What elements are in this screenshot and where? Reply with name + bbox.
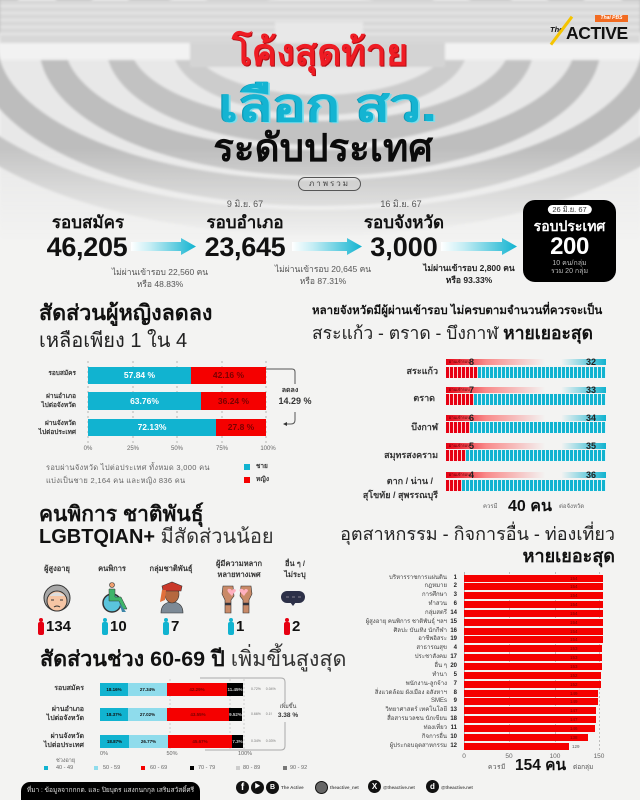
row: district xyxy=(40,392,266,410)
note: should be 40 per province xyxy=(483,498,584,515)
note: province to national totals xyxy=(46,462,210,484)
row: district: ผ่านอำเภอ xyxy=(52,706,84,713)
chart: occupation groups: 129 xyxy=(572,744,580,749)
chart: occupation groups: 9 xyxy=(454,698,457,704)
arrow 3 xyxy=(441,238,517,255)
row: district xyxy=(40,708,270,721)
province row: Sa Kaeo: สระแก้ว xyxy=(407,366,438,376)
note: should be 40 per province: 40 คน xyxy=(508,498,552,515)
chart: occupation groups: 17 xyxy=(450,654,457,660)
chart: occupation groups: กฎหมาย xyxy=(425,583,447,589)
title: โค้งสุดท้าย xyxy=(232,32,408,73)
icon: X: X xyxy=(372,782,377,791)
icon: elderly face xyxy=(44,584,70,612)
chart: occupation groups: 152 xyxy=(570,682,578,687)
row: province: 72.13% xyxy=(138,422,166,432)
group: gender diversity xyxy=(216,559,262,635)
heading: occupations missing xyxy=(330,522,616,568)
legend: gender: หญิง xyxy=(256,476,269,483)
row: province: ไปต่อประเทศ xyxy=(44,742,84,749)
icon: youtube: ▶ xyxy=(254,784,260,790)
bracket: decrease 14.29%: ลดลง xyxy=(282,387,298,394)
logo: The Active: The xyxy=(550,25,563,34)
step: national black card xyxy=(523,200,616,282)
province row: Samut Songkhram xyxy=(384,441,606,461)
row: province: 27.8 % xyxy=(228,422,254,432)
chart: occupation groups: พนักงาน-ลูกจ้าง xyxy=(406,681,447,687)
arrow 2 xyxy=(292,238,362,255)
legend: age groups xyxy=(44,758,314,774)
province row: Trat: ผ่านเข้ารอบ xyxy=(449,387,470,392)
axis labels: 0 xyxy=(462,753,466,760)
chart: occupation groups: ผู้ประกอบอุตสาหกรรม xyxy=(390,743,447,749)
note: should be 154 per group: ควรมี xyxy=(488,764,506,771)
group: other / unspecified: ไม่ระบุ xyxy=(284,570,306,579)
province row: Samut Songkhram: ผ่านเข้ารอบ xyxy=(449,443,470,448)
step: district: 23,645 xyxy=(205,232,285,262)
chart: occupation groups: 154 xyxy=(570,629,578,634)
heading: disabled, ethnic, LGBTQIAN+: LGBTQIAN+ มีสัดส่วนน้อย xyxy=(39,526,274,548)
note: should be 40 per province: ควรมี xyxy=(483,504,498,510)
bracket: decrease 14.29%: 14.29 % xyxy=(278,396,312,406)
row: district: ไปต่อจังหวัด xyxy=(47,715,84,722)
chart: occupation groups: สื่อสารมวลชน นักเขียน xyxy=(387,716,447,722)
province row: Sa Kaeo: ผ่านเข้ารอบ xyxy=(449,359,470,364)
note: province to national totals: รอบผ่านจังหวัด ไปต่อประเทศ ทั้งหมด 3,000 คน xyxy=(46,463,210,472)
row: province: 0.34% 0.03% xyxy=(251,739,276,743)
row: district: 0.66% 0.1% xyxy=(251,712,274,716)
chart: occupation groups: 19 xyxy=(450,636,457,642)
note: eliminated round 3: ไม่ผ่านเข้ารอบ 2,800 คน xyxy=(423,263,515,273)
chart: occupation groups: 1 xyxy=(454,574,457,580)
count: 7 xyxy=(163,618,179,635)
heading: women share: สัดส่วนผู้หญิงลดลง xyxy=(39,301,212,325)
count: 7: 7 xyxy=(171,618,179,635)
row: province xyxy=(38,419,266,436)
chart: occupation groups: 153 xyxy=(570,664,578,669)
row: province: 45.67% xyxy=(192,739,208,744)
row: applicants xyxy=(48,367,266,384)
chart: occupation groups: 146 xyxy=(570,726,578,731)
icon: ethnic person xyxy=(160,582,184,614)
chart: occupation groups: 4 xyxy=(454,645,457,651)
province row: Bueng Kan: 34 xyxy=(586,413,596,423)
heading: provinces missing: สระแก้ว - ตราด - บึงกาฬ หายเยอะสุด xyxy=(312,323,593,343)
step: province: รอบจังหวัด xyxy=(364,213,444,232)
axis labels: 25% xyxy=(127,446,139,452)
row: province: ผ่านจังหวัด xyxy=(45,420,76,427)
chart: occupation groups: 138 xyxy=(570,735,578,740)
note: eliminated round 1: หรือ 48.83% xyxy=(137,279,183,289)
province row: Trat: 7 xyxy=(469,385,474,395)
heading: occupations missing: หายเยอะสุด xyxy=(523,546,615,566)
step: national black card: 10 คน/กลุ่ม xyxy=(552,260,587,267)
chart: occupation groups: 2 xyxy=(454,583,457,589)
chart: occupation groups: การศึกษา xyxy=(422,592,447,598)
legend: age groups: 70 - 79 xyxy=(198,765,215,771)
chart: occupation groups: ศิลปะ บันเทิง นักกีฬา xyxy=(393,628,447,634)
axis labels: 0% xyxy=(100,751,108,757)
chart: occupation groups: วิทยาศาสตร์ เทคโนโลยี xyxy=(385,707,447,713)
note: eliminated round 3: หรือ 93.33% xyxy=(446,275,492,285)
group: elderly xyxy=(38,564,71,635)
chart: occupation groups: สาธารณสุข xyxy=(416,645,447,651)
chart: occupation groups: 153 xyxy=(570,655,578,660)
note: should be 154 per group xyxy=(488,758,598,776)
chart: occupation groups: 20 xyxy=(450,663,457,669)
row: applicants xyxy=(40,683,270,696)
province row: Bueng Kan xyxy=(411,413,606,433)
note: eliminated round 2: หรือ 87.31% xyxy=(300,276,346,286)
social icons: @theactive.net xyxy=(441,785,473,790)
step: province xyxy=(364,199,444,262)
social icons: theactive_net xyxy=(330,785,359,790)
axis labels: 50% xyxy=(166,751,178,757)
note: eliminated round 1 xyxy=(111,267,208,289)
logo: The Active: ACTIVE xyxy=(566,23,628,43)
row: district: ไปต่อจังหวัด xyxy=(41,402,76,409)
province row: Bueng Kan: บึงกาฬ xyxy=(411,422,438,432)
row: province: ผ่านจังหวัด xyxy=(51,733,84,740)
count: 10: 10 xyxy=(110,618,127,635)
chart: occupation groups: 3 xyxy=(454,592,457,598)
axis labels: 150 xyxy=(594,753,604,760)
row: applicants: 0.72% 0.04% xyxy=(251,687,276,691)
chart: age share by round xyxy=(40,676,300,760)
count: 2 xyxy=(284,618,304,635)
chart: occupation groups: 8 xyxy=(454,690,457,696)
axis labels: 50 xyxy=(505,753,513,760)
step: applicants: รอบสมัคร xyxy=(52,213,124,232)
icon: X xyxy=(368,780,381,793)
axis labels: 0% xyxy=(84,446,92,452)
title: เลือก สว. xyxy=(219,79,437,131)
axis labels: 100 xyxy=(550,753,560,760)
province row: Tak, Nan, Sukhothai, Suphan Buri xyxy=(363,470,606,501)
axis labels: 50% xyxy=(171,446,183,452)
count: 1 xyxy=(228,618,244,635)
source box: ที่มา : ข้อมูลจากกกต. และ ปิยบุตร แสงกนกกุล เสริมสวัสดิ์ศรี xyxy=(27,787,194,794)
chart: occupation groups: 12 xyxy=(450,743,457,749)
bracket: decrease 14.29% xyxy=(266,368,312,426)
logo: The Active xyxy=(550,15,628,46)
chart: occupation groups: ประชาสังคม xyxy=(415,654,447,660)
chart: gender share by round xyxy=(38,361,276,452)
row: applicants: 11.45% xyxy=(227,687,242,692)
row: province: 18.87% xyxy=(107,739,122,744)
chart: occupation groups: 16 xyxy=(450,628,457,634)
title: ระดับประเทศ xyxy=(213,127,433,170)
group: gender diversity: ผู้มีความหลาก xyxy=(216,559,262,568)
icon: tiktok: d xyxy=(430,782,435,791)
row: province xyxy=(40,735,270,748)
icon: wheelchair xyxy=(102,582,128,613)
step: district: รอบอำเภอ xyxy=(206,213,284,232)
note: eliminated round 3 xyxy=(422,263,515,285)
chart: occupation groups: ท่องเที่ยว xyxy=(424,725,447,731)
province row: Tak, Nan, Sukhothai, Suphan Buri: 4 xyxy=(469,470,474,480)
callout: increase 3.38%: เพิ่มขึ้น xyxy=(280,704,296,710)
chart: occupation groups: 15 xyxy=(450,619,457,625)
row: province: ไปต่อประเทศ xyxy=(39,429,76,436)
axis labels: 75% xyxy=(216,446,228,452)
legend: age groups: 60 - 69 xyxy=(150,765,167,771)
note: should be 154 per group: ต่อกลุ่ม xyxy=(573,764,593,771)
heading: women share: เหลือเพียง 1 ใน 4 xyxy=(39,330,187,352)
chart: occupation groups: 154 xyxy=(570,611,578,616)
icon: facebook xyxy=(236,781,249,794)
count: 134: 134 xyxy=(46,618,71,635)
step: applicants xyxy=(47,213,127,262)
callout: increase 3.38% xyxy=(272,704,306,722)
note: eliminated round 1: ไม่ผ่านเข้ารอบ 22,560 คน xyxy=(112,267,208,277)
row: district: 9.52% xyxy=(229,712,242,717)
arrow 1 xyxy=(131,238,196,255)
note: should be 154 per group: 154 คน xyxy=(515,757,566,774)
social icons xyxy=(236,779,481,795)
province row: Sa Kaeo: 32 xyxy=(586,357,596,367)
row: applicants: รอบสมัคร xyxy=(54,685,84,692)
axis labels: 100% xyxy=(238,751,252,757)
step: applicants: 46,205 xyxy=(47,232,127,262)
group: disabled xyxy=(98,564,128,635)
chart: occupation groups: 11 xyxy=(451,725,457,731)
group: elderly: ผู้สูงอายุ xyxy=(44,564,70,573)
chart: occupation groups: ผู้สูงอายุ คนพิการ ชาติพันธุ์ ฯลฯ xyxy=(366,619,447,625)
title xyxy=(213,30,437,170)
icon: youtube xyxy=(251,781,264,794)
province row: Samut Songkhram: 35 xyxy=(586,441,596,451)
row: district: 43.55% xyxy=(190,712,206,717)
province row: Tak, Nan, Sukhothai, Suphan Buri: 36 xyxy=(586,470,596,480)
group: other / unspecified: อื่น ๆ / xyxy=(285,559,305,568)
heading: disabled, ethnic, LGBTQIAN+: คนพิการ ชาติพันธุ์ xyxy=(39,503,204,526)
chart: occupation groups: 6 xyxy=(454,601,457,607)
logo: The Active: Thai PBS xyxy=(601,15,622,21)
note: eliminated round 2 xyxy=(274,264,371,286)
legend: age groups: 40 - 49 xyxy=(56,765,73,771)
row: applicants: รอบสมัคร xyxy=(48,370,76,377)
icon: speech bubble xyxy=(281,591,306,607)
pill: overview xyxy=(298,177,361,191)
group: ethnic xyxy=(150,564,192,635)
group: ethnic: กลุ่มชาติพันธุ์ xyxy=(150,564,192,573)
row: province: 7.3% xyxy=(232,739,243,744)
note: should be 40 per province: ต่อจังหวัด xyxy=(559,504,584,510)
icon: facebook: f xyxy=(241,782,244,793)
province row: Tak, Nan, Sukhothai, Suphan Buri: สุโขทัย / สุพรรณบุรี xyxy=(363,490,438,500)
icon: instagram xyxy=(315,781,328,794)
group: gender diversity: หลายทางเพศ xyxy=(217,570,261,579)
row: province: 26.77% xyxy=(141,739,156,744)
province row: Bueng Kan: 6 xyxy=(469,413,474,423)
axis labels xyxy=(84,446,276,452)
axis labels: 100% xyxy=(260,446,276,452)
step: province: 16 มิ.ย. 67 xyxy=(380,199,422,209)
province row: Sa Kaeo xyxy=(406,357,606,378)
source box xyxy=(21,782,200,800)
legend: age groups: ช่วงอายุ xyxy=(56,758,75,764)
chart: occupation groups: 147 xyxy=(570,708,578,713)
pill: overview: ภาพรวม xyxy=(309,179,350,188)
chart: occupation groups: 154 xyxy=(570,584,578,589)
legend: age groups: 90 - 92 xyxy=(290,765,307,771)
icon: hands with hearts xyxy=(222,586,252,614)
step: national black card: 26 มิ.ย. 67 xyxy=(552,205,587,214)
chart: occupation groups: อื่น ๆ xyxy=(434,663,447,669)
legend: age groups: 80 - 89 xyxy=(243,765,260,771)
province row: Samut Songkhram: 5 xyxy=(469,441,474,451)
count: 10 xyxy=(102,618,127,635)
row: district: ผ่านอำเภอ xyxy=(46,393,76,400)
province row: Trat xyxy=(413,385,606,405)
chart: occupation groups: 152 xyxy=(570,673,578,678)
heading: provinces missing: หลายจังหวัดมีผู้ผ่านเข้ารอบ ไม่ครบตามจำนวนที่ควรจะเป็น xyxy=(312,305,602,317)
legend: gender: ชาย xyxy=(256,463,268,470)
row: district: 36.24 % xyxy=(218,396,249,406)
chart: occupation groups: 149 xyxy=(570,690,578,696)
chart: occupation groups: 153 xyxy=(570,646,578,651)
row: district: 27.02% xyxy=(140,712,155,717)
legend: age groups: 50 - 59 xyxy=(103,765,120,771)
heading: occupations missing: อุตสาหกรรม - กิจการอื่น - ท่องเที่ยว xyxy=(340,524,615,544)
chart: occupation groups: สิ่งแวดล้อม ผังเมือง อสังหาฯ xyxy=(375,690,447,696)
chart: occupation groups: 154 xyxy=(570,576,578,580)
row: district: 63.76% xyxy=(130,396,159,406)
province row: Sa Kaeo: 8 xyxy=(469,357,474,367)
chart: occupation groups: ทำสวน xyxy=(429,601,447,607)
step: national black card: รอบประเทศ xyxy=(534,218,605,234)
chart: occupation groups: 147 xyxy=(570,717,578,722)
icon: tiktok xyxy=(426,780,439,793)
row: applicants: 42.16 % xyxy=(213,370,244,380)
note: province to national totals: แบ่งเป็นชาย 2,164 คน และหญิง 836 คน xyxy=(46,476,185,484)
heading: women share xyxy=(39,301,212,352)
chart: occupation groups: อาชีพอิสระ xyxy=(418,636,447,642)
row: applicants: 57.84 % xyxy=(124,370,155,380)
chart: occupation groups: ทำนา xyxy=(432,672,447,678)
chart: occupation groups: 13 xyxy=(450,707,457,713)
chart: occupation groups: SMEs xyxy=(431,698,447,704)
heading: disabled, ethnic, LGBTQIAN+ xyxy=(39,502,274,548)
icon: blockdit xyxy=(266,781,279,794)
social icons: The Active xyxy=(281,785,304,790)
province row: Trat: 33 xyxy=(586,385,596,395)
row: district: 18.37% xyxy=(106,712,122,717)
step: national black card: รวม 20 กลุ่ม xyxy=(551,268,588,275)
chart: occupation groups: 154 xyxy=(570,637,578,642)
chart: occupation groups: กลุ่มสตรี xyxy=(425,610,447,616)
province row: Trat: ตราด xyxy=(413,393,435,403)
row: applicants: 27.34% xyxy=(140,687,155,692)
chart: occupation groups: 149 xyxy=(570,699,578,704)
province row: Bueng Kan: ผ่านเข้ารอบ xyxy=(449,415,470,420)
legend: gender xyxy=(244,463,269,483)
step: district: 9 มิ.ย. 67 xyxy=(227,199,263,209)
chart: occupation groups: 18 xyxy=(450,716,457,722)
group: disabled: คนพิการ xyxy=(98,564,126,573)
province row: Tak, Nan, Sukhothai, Suphan Buri: ตาก / น่าน / xyxy=(387,476,433,486)
row: applicants: 42.29% xyxy=(189,687,205,692)
count: 2: 2 xyxy=(292,618,300,635)
chart: occupation groups xyxy=(0,572,640,762)
chart: occupation groups: 10 xyxy=(450,734,457,740)
province row: Tak, Nan, Sukhothai, Suphan Buri: ผ่านเข้ารอบ xyxy=(449,472,470,477)
step: district xyxy=(205,199,285,262)
heading: age 60-69 share: สัดส่วนช่วง 60-69 ปี เพิ่มขึ้นสูงสุด xyxy=(40,647,346,671)
row: applicants: 18.16% xyxy=(106,687,122,692)
step: national black card: 200 xyxy=(550,233,589,260)
chart: occupation groups: 7 xyxy=(454,681,457,687)
chart: occupation groups: 154 xyxy=(570,593,578,598)
chart: occupation groups: บริหารราชการแผ่นดิน xyxy=(389,574,447,580)
chart: occupation groups: 154 xyxy=(570,602,578,607)
chart: occupation groups: กิจการอื่น xyxy=(422,734,447,740)
callout: increase 3.38%: 3.38 % xyxy=(278,712,298,719)
chart: occupation groups: 154 xyxy=(570,620,578,625)
icon: blockdit: B xyxy=(270,784,275,791)
chart: occupation groups: 14 xyxy=(450,610,457,616)
chart: occupation groups: 5 xyxy=(454,672,457,678)
social icons: @theactive.net xyxy=(383,785,415,790)
group: other / unspecified xyxy=(276,558,316,636)
heading: provinces missing xyxy=(312,302,602,344)
axis labels xyxy=(440,753,620,762)
province row: Samut Songkhram: สมุทรสงคราม xyxy=(384,450,438,460)
axis labels xyxy=(40,751,280,759)
step: province: 3,000 xyxy=(370,232,438,262)
background: parliament chamber xyxy=(0,0,640,224)
note: eliminated round 2: ไม่ผ่านเข้ารอบ 20,645 คน xyxy=(275,264,371,274)
count: 1: 1 xyxy=(236,618,244,635)
